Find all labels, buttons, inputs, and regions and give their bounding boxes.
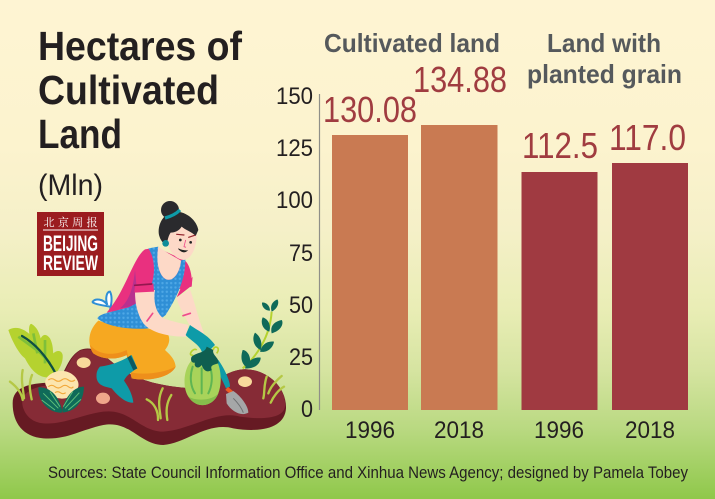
chart: y axis: 75 bbox=[289, 240, 313, 267]
bar: cultivated 2018: 134.88 bbox=[413, 59, 507, 100]
bar: cultivated 2018 bbox=[413, 59, 507, 444]
title bbox=[38, 23, 242, 157]
title: Land bbox=[38, 111, 122, 157]
chart: bars bbox=[323, 59, 688, 444]
apron bbox=[97, 247, 185, 329]
melon bbox=[185, 347, 221, 405]
heading: land with planted grain bbox=[527, 28, 682, 89]
bar: cultivated 1996: 1996 bbox=[345, 417, 395, 444]
logo: Beijing Review: BEIJING bbox=[43, 231, 98, 256]
glove right on trowel bbox=[213, 360, 230, 388]
bar: grain 1996: 112.5 bbox=[522, 125, 598, 166]
boot bbox=[96, 355, 137, 403]
heading: land with planted grain: planted grain bbox=[527, 59, 682, 89]
chart: y axis: 0 bbox=[301, 396, 313, 423]
heading: land with planted grain: Land with bbox=[547, 28, 661, 58]
grass tufts bbox=[10, 370, 284, 420]
apron bow bbox=[93, 292, 112, 310]
bar: grain 2018 bbox=[609, 117, 688, 444]
chart: y axis: 125 bbox=[276, 135, 313, 162]
heading: cultivated land: Cultivated land bbox=[324, 28, 500, 58]
ground bbox=[13, 348, 286, 445]
chart: y axis: 150 bbox=[276, 83, 313, 110]
pants bbox=[89, 321, 176, 380]
neck and chest bbox=[157, 247, 181, 280]
logo: Beijing Review bbox=[37, 212, 104, 276]
bar: grain 1996: 1996 bbox=[534, 417, 584, 444]
unit label: (Mln) bbox=[38, 169, 103, 202]
chart: y axis: 100 bbox=[276, 187, 313, 214]
cauliflower bbox=[38, 371, 84, 413]
illustration: woman gardening bbox=[8, 201, 286, 445]
woman bbox=[89, 201, 230, 403]
shirt bbox=[107, 247, 192, 313]
bar: cultivated 1996 bbox=[323, 89, 417, 444]
arm right bbox=[177, 289, 204, 333]
logo: Beijing Review: REVIEW bbox=[43, 252, 98, 275]
chart: y axis: 50 bbox=[289, 292, 313, 319]
trowel bbox=[226, 388, 248, 414]
chart: y axis bbox=[276, 83, 320, 423]
icon: right sprig bbox=[241, 299, 282, 368]
icon: left leaf bbox=[8, 324, 63, 377]
bar: grain 2018: 117.0 bbox=[609, 117, 686, 158]
bar: grain 2018: 2018 bbox=[625, 417, 675, 444]
logo: Beijing Review: 北京周报 bbox=[44, 214, 98, 230]
bar: cultivated 2018: 2018 bbox=[434, 417, 484, 444]
hair bbox=[159, 212, 198, 245]
arm left bbox=[135, 290, 188, 337]
face bbox=[177, 234, 195, 252]
chart: y axis: 25 bbox=[289, 344, 313, 371]
title: Hectares of bbox=[38, 23, 242, 69]
bar: cultivated 1996: 130.08 bbox=[323, 89, 417, 130]
glove bbox=[186, 325, 215, 353]
bar: grain 1996 bbox=[522, 125, 598, 444]
head bbox=[168, 223, 197, 260]
title: Cultivated bbox=[38, 67, 219, 113]
stones bbox=[77, 357, 252, 404]
